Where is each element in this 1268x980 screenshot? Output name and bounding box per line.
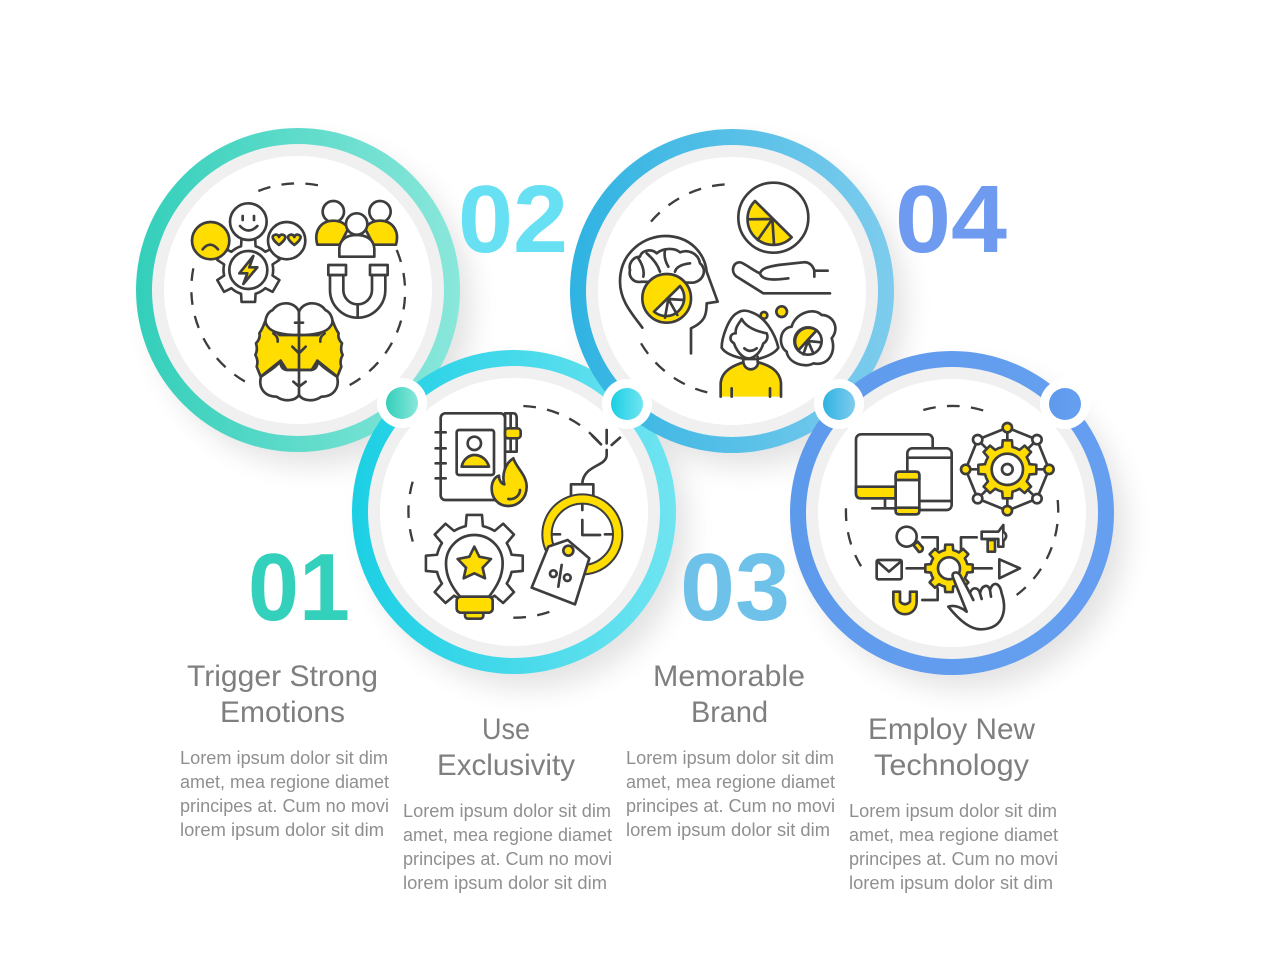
connector node 4	[1040, 379, 1090, 429]
icon: notebook, flame, bomb, tag, gear	[408, 406, 620, 622]
heading: Trigger Strong Emotions	[187, 660, 378, 729]
number 02: 02	[458, 166, 568, 273]
heading: Use Exclusivity	[437, 713, 575, 782]
text block 2	[403, 801, 612, 893]
heading: Employ New Technology: Technology	[874, 749, 1029, 782]
text block 3	[626, 748, 835, 840]
connector node 1	[377, 378, 427, 428]
text block 3: amet, mea regione diamet	[626, 772, 835, 792]
text block 3: principes at. Cum no movi	[626, 796, 835, 816]
heading: Trigger Strong Emotions: Trigger Strong	[187, 660, 378, 693]
icon: emotions, people, magnet, brain	[191, 183, 405, 400]
heading: Employ New Technology: Employ New	[868, 713, 1035, 746]
heading: Trigger Strong Emotions: Emotions	[220, 696, 345, 729]
text block 2: principes at. Cum no movi	[403, 849, 612, 869]
text block 4: principes at. Cum no movi	[849, 849, 1058, 869]
heading: Memorable Brand: Memorable	[653, 660, 805, 693]
icon: devices, network gear, digital tools	[846, 406, 1058, 629]
text block 1: amet, mea regione diamet	[180, 772, 389, 792]
text block 3: lorem ipsum dolor sit dim	[626, 820, 830, 840]
text block 4: Lorem ipsum dolor sit dim	[849, 801, 1057, 821]
text block 1: Lorem ipsum dolor sit dim	[180, 748, 388, 768]
text block 1: principes at. Cum no movi	[180, 796, 389, 816]
panel: circle 3 ring	[570, 129, 894, 453]
heading: Use Exclusivity: Exclusivity	[437, 749, 575, 782]
panel: circle 2 ring	[352, 350, 676, 674]
heading: Memorable Brand	[653, 660, 805, 729]
text block 1: lorem ipsum dolor sit dim	[180, 820, 384, 840]
text block 1	[180, 748, 389, 840]
number 04: 04	[895, 166, 1007, 273]
text block 4: amet, mea regione diamet	[849, 825, 1058, 845]
icon: head, lemon, hand, woman	[620, 183, 835, 397]
heading: Use Exclusivity: Use	[482, 713, 530, 746]
text block 4	[849, 801, 1058, 893]
heading: Employ New Technology	[868, 713, 1035, 782]
connector node 2	[602, 379, 652, 429]
heading: Memorable Brand: Brand	[691, 696, 768, 729]
text block 2: amet, mea regione diamet	[403, 825, 612, 845]
number 01: 01	[248, 534, 350, 641]
text block 2: Lorem ipsum dolor sit dim	[403, 801, 611, 821]
text block 2: lorem ipsum dolor sit dim	[403, 873, 607, 893]
text block 3: Lorem ipsum dolor sit dim	[626, 748, 834, 768]
text block 4: lorem ipsum dolor sit dim	[849, 873, 1053, 893]
panel: circle 1 ring	[136, 128, 460, 452]
panel: circle 4 ring	[790, 351, 1114, 675]
connector node 3	[814, 379, 864, 429]
number 03: 03	[680, 534, 790, 641]
